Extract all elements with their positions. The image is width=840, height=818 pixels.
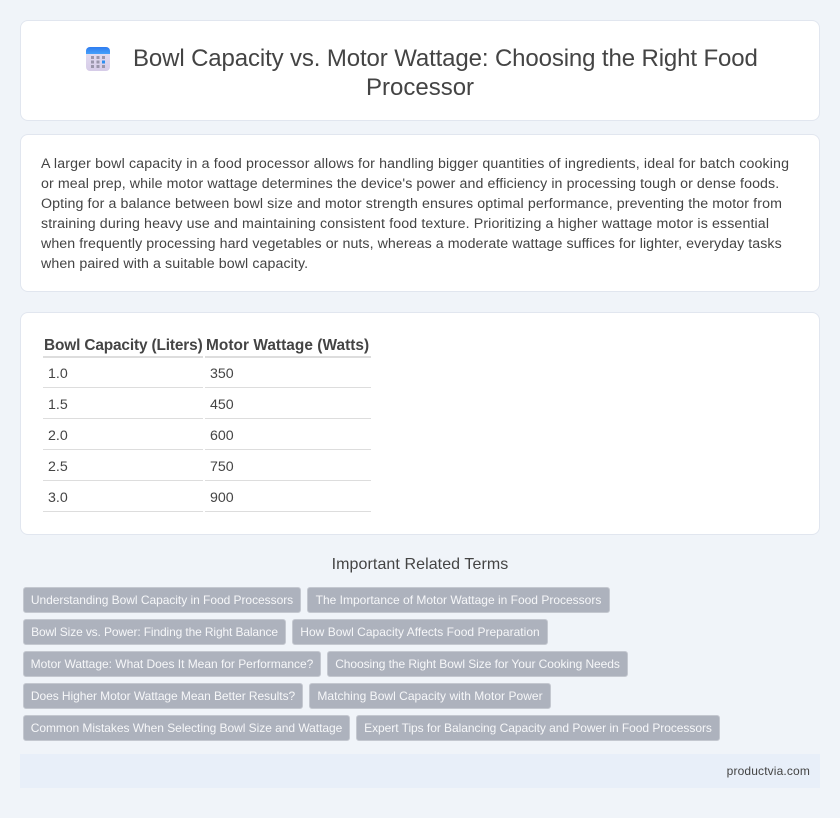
title: Bowl Capacity vs. Motor Wattage: Choosing the Right Food	[133, 45, 758, 72]
table: 750	[210, 459, 234, 475]
tags: Choosing the Right Bowl Size for Your Cooking Needs	[335, 657, 620, 671]
footer text: productvia.com	[727, 764, 810, 778]
footer bar	[20, 754, 820, 788]
tags: Does Higher Motor Wattage Mean Better Results?	[31, 689, 295, 703]
table: Motor Wattage (Watts)	[206, 337, 369, 354]
tags: Common Mistakes When Selecting Bowl Size and Wattage	[31, 721, 342, 735]
title: Processor	[366, 74, 474, 101]
tags: The Importance of Motor Wattage in Food Processors	[316, 593, 601, 607]
table: 2.0	[48, 428, 68, 444]
header card	[20, 20, 820, 121]
table: 2.5	[48, 459, 68, 475]
tags: Expert Tips for Balancing Capacity and Power in Food Processors	[364, 721, 712, 735]
table: 450	[210, 397, 234, 413]
table: 1.0	[48, 366, 68, 382]
panel: description	[20, 134, 820, 292]
description text: Opting for a balance between bowl size and motor strength ensures optimal performance, preventing the motor from	[41, 196, 782, 212]
tags: Matching Bowl Capacity with Motor Power	[317, 689, 543, 703]
table: 350	[210, 366, 234, 382]
table: Bowl Capacity (Liters)	[44, 337, 203, 354]
tags: How Bowl Capacity Affects Food Preparation	[300, 625, 540, 639]
icon: calendar	[86, 47, 110, 71]
table: 1.5	[48, 397, 68, 413]
tags	[23, 587, 720, 741]
table: 600	[210, 428, 234, 444]
description text	[41, 156, 789, 272]
tags: Motor Wattage: What Does It Mean for Performance?	[31, 657, 313, 671]
tags: Bowl Size vs. Power: Finding the Right Balance	[31, 625, 278, 639]
table	[43, 337, 371, 512]
title	[133, 45, 758, 101]
panel: table	[20, 312, 820, 535]
table: 900	[210, 490, 234, 506]
table: 3.0	[48, 490, 68, 506]
description text: or meal prep, while motor wattage determines the device's power and efficiency in processing tough or dense foods.	[41, 176, 779, 192]
heading: related terms: Important Related Terms	[332, 556, 508, 573]
tags: Understanding Bowl Capacity in Food Processors	[31, 593, 293, 607]
description text: straining during heavy use and maintaining consistent food texture. Prioritizing a higher wattage motor is essential	[41, 216, 769, 232]
description text: A larger bowl capacity in a food processor allows for handling bigger quantities of ingredients, ideal for batch cooking	[41, 156, 789, 172]
description text: when frequently processing hard vegetables or nuts, whereas a moderate wattage suffices for lighter, everyday tasks	[41, 236, 782, 252]
description text: when paired with a suitable bowl capacity.	[41, 256, 308, 272]
